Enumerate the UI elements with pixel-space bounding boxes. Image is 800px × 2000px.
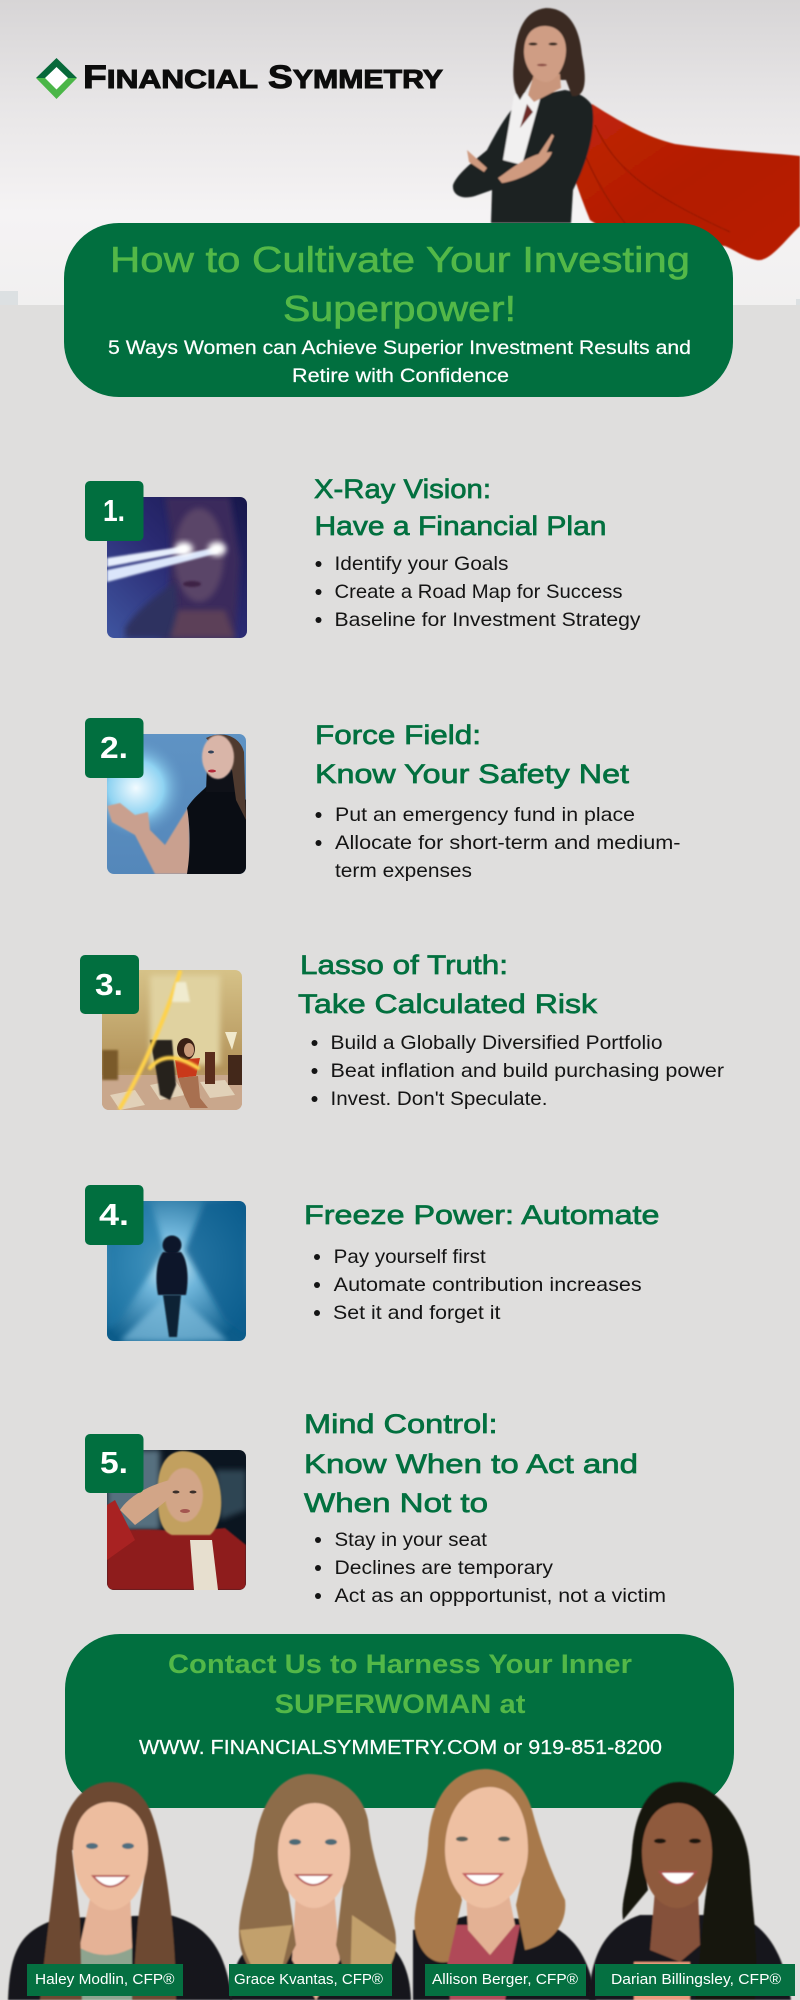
heading: X-Ray Vision: xyxy=(314,474,491,504)
number badge: 1. xyxy=(103,493,125,528)
bullet list: Baseline for Investment Strategy xyxy=(334,609,641,631)
bullet list: Automate contribution increases xyxy=(334,1274,642,1296)
number badge xyxy=(85,481,144,541)
name label: Allison Berger: Allison Berger, CFP® xyxy=(432,1971,578,1988)
number badge: 5. xyxy=(100,1445,128,1480)
bullet list xyxy=(316,553,641,631)
heading: Force Field: xyxy=(315,720,481,750)
number badge: 4. xyxy=(99,1197,129,1232)
name label: Allison Berger xyxy=(425,1964,586,1996)
portrait: Allison Berger xyxy=(413,1769,596,2000)
portrait: Haley Modlin xyxy=(8,1782,232,2000)
name label: Haley Modlin xyxy=(27,1964,183,1996)
bullet list: term expenses xyxy=(335,860,472,882)
title: How to Cultivate Your Investing xyxy=(110,239,690,280)
call to action heading xyxy=(168,1649,633,1719)
photo: freeze power xyxy=(107,1201,246,1341)
heading xyxy=(298,950,598,1019)
face xyxy=(524,26,566,82)
bullet list: Declines are temporary xyxy=(334,1557,553,1579)
heading: Mind Control: xyxy=(304,1409,498,1439)
number badge xyxy=(85,1185,144,1245)
name label: Darian Billingsley: Darian Billingsley, CFP® xyxy=(611,1971,781,1988)
bullet list xyxy=(312,1032,725,1110)
jacket xyxy=(453,90,593,223)
bullet list: Invest. Don't Speculate. xyxy=(330,1088,548,1110)
heading: Lasso of Truth: xyxy=(300,950,508,980)
hair xyxy=(513,8,585,100)
heading: Know When to Act and xyxy=(304,1449,638,1479)
title: Superpower! xyxy=(283,288,516,329)
heading: When Not to xyxy=(304,1488,488,1518)
contact panel xyxy=(65,1634,734,1808)
logo wordmark: SYMMETRY xyxy=(268,59,443,95)
bullet list: Create a Road Map for Success xyxy=(334,581,623,603)
bullet list: Stay in your seat xyxy=(334,1529,488,1551)
bullet list: Identify your Goals xyxy=(334,553,509,575)
step 4 xyxy=(85,1185,660,1341)
title xyxy=(110,239,690,329)
name label: Grace Kvantas: Grace Kvantas, CFP® xyxy=(234,1971,383,1988)
heading: Have a Financial Plan xyxy=(314,511,606,541)
portrait: Grace Kvantas xyxy=(230,1774,411,2000)
bullet list: Beat inflation and build purchasing power xyxy=(330,1060,725,1082)
number badge: 2. xyxy=(100,730,128,765)
name label: Darian Billingsley xyxy=(595,1964,795,1996)
cape folds xyxy=(585,125,730,240)
number badge xyxy=(80,955,139,1014)
bullet list: Act as an oppportunist, not a victim xyxy=(334,1585,666,1607)
bullet list xyxy=(316,804,680,882)
bullet list: Set it and forget it xyxy=(333,1302,501,1324)
subtitle xyxy=(108,338,691,387)
portrait: Darian Billingsley xyxy=(589,1782,791,2000)
hero: superwoman with red cape xyxy=(453,8,800,260)
subtitle: Retire with Confidence xyxy=(292,366,509,387)
crossed arms hands xyxy=(467,134,554,183)
heading: Take Calculated Risk xyxy=(298,989,598,1019)
name label: Grace Kvantas xyxy=(229,1964,392,1996)
contact details: WWW. FINANCIALSYMMETRY.COM or 919-851-8200 xyxy=(139,1737,662,1759)
bullet list: Pay yourself first xyxy=(334,1246,486,1268)
bullet list: Put an emergency fund in place xyxy=(335,804,635,826)
number badge: 3. xyxy=(95,967,123,1002)
heading xyxy=(315,720,630,789)
neck xyxy=(528,74,561,102)
logo xyxy=(36,58,443,99)
photo: force field xyxy=(107,734,246,874)
bullet list xyxy=(315,1529,666,1607)
step 5 xyxy=(85,1409,666,1607)
step 1 xyxy=(85,474,641,638)
step 2 xyxy=(85,718,680,882)
call to action heading: SUPERWOMAN at xyxy=(274,1689,526,1719)
photo: x-ray vision xyxy=(107,497,247,638)
photo: lasso of truth xyxy=(102,970,242,1110)
number badge xyxy=(85,1434,144,1493)
photo: mind control xyxy=(107,1450,246,1590)
title panel xyxy=(64,223,733,397)
bullet list xyxy=(314,1246,642,1324)
call to action heading: Contact Us to Harness Your Inner xyxy=(168,1649,633,1679)
cape xyxy=(572,104,800,260)
bullet list: Allocate for short-term and medium- xyxy=(335,832,680,854)
logo wordmark: FINANCIAL xyxy=(83,59,258,95)
number badge xyxy=(85,718,144,778)
shirt xyxy=(503,92,542,165)
heading xyxy=(314,474,606,541)
name label: Haley Modlin: Haley Modlin, CFP® xyxy=(35,1971,174,1988)
heading: Know Your Safety Net xyxy=(315,759,630,789)
step 3 xyxy=(80,950,725,1110)
heading: Freeze Power: Automate xyxy=(304,1200,660,1230)
icon: diamond mark xyxy=(36,58,77,99)
header photo backdrop xyxy=(0,0,800,305)
facial details xyxy=(528,42,558,66)
heading xyxy=(304,1409,638,1518)
bullet list: Build a Globally Diversified Portfolio xyxy=(330,1032,663,1054)
logo wordmark xyxy=(83,59,443,95)
subtitle: 5 Ways Women can Achieve Superior Investment Results and xyxy=(108,338,691,359)
